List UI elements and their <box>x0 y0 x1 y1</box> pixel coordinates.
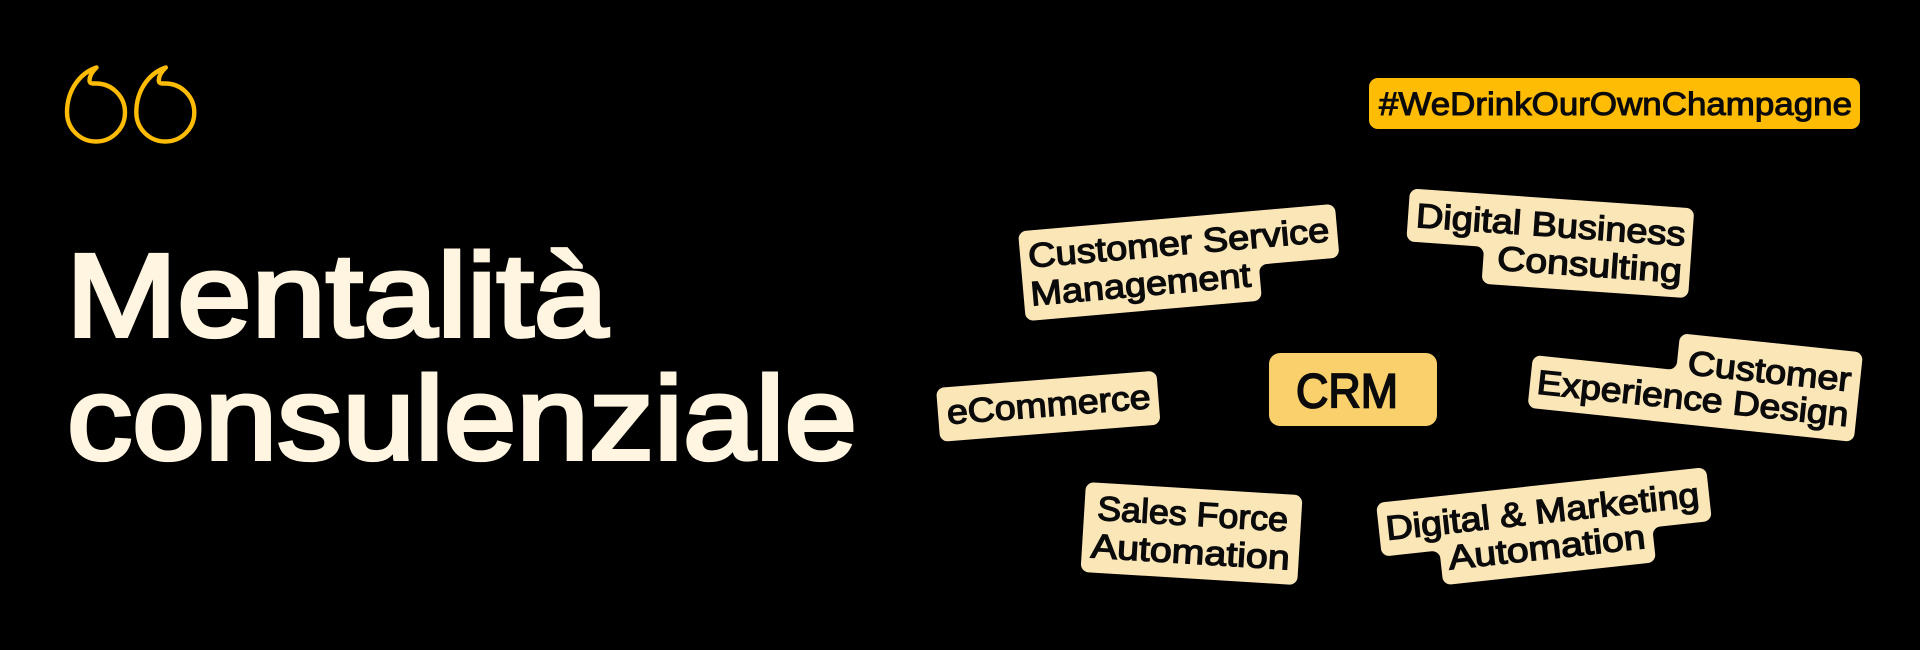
tag: Digital & Marketing Automation <box>1376 467 1716 591</box>
tag: Customer Experience Design: Experience Design <box>1535 364 1850 434</box>
title: consulenziale <box>67 353 857 485</box>
tag: Sales Force Automation <box>1081 482 1303 585</box>
tag: eCommerce <box>936 371 1161 442</box>
tag: Digital Business Consulting: Consulting <box>1496 240 1683 291</box>
title: Mentalità <box>66 230 608 362</box>
tag: Sales Force Automation: Automation <box>1090 527 1291 578</box>
tag: Digital & Marketing Automation: Digital & Marketing <box>1384 476 1701 548</box>
tag: Customer Service Management <box>1018 204 1343 321</box>
hashtag badge: #WeDrinkOurOwnChampagne <box>1379 86 1852 122</box>
tag: Sales Force Automation: Sales Force <box>1096 490 1289 539</box>
tag: Digital & Marketing Automation: Automation <box>1446 518 1647 577</box>
tag: Customer Experience Design <box>1527 318 1863 442</box>
tag: Customer Service Management: Customer Service <box>1027 211 1331 276</box>
tag: Digital Business Consulting <box>1404 188 1694 298</box>
hashtag badge <box>1369 78 1860 129</box>
title <box>66 230 857 485</box>
icon: quotation marks <box>67 68 194 142</box>
tag: eCommerce: eCommerce <box>946 378 1152 432</box>
tag: Customer Service Management: Management <box>1029 256 1253 314</box>
central badge: CRM <box>1269 353 1437 426</box>
tag: Digital Business Consulting: Digital Business <box>1415 197 1687 254</box>
central badge: CRM: CRM <box>1296 366 1398 418</box>
tag: Customer Experience Design: Customer <box>1686 344 1853 399</box>
